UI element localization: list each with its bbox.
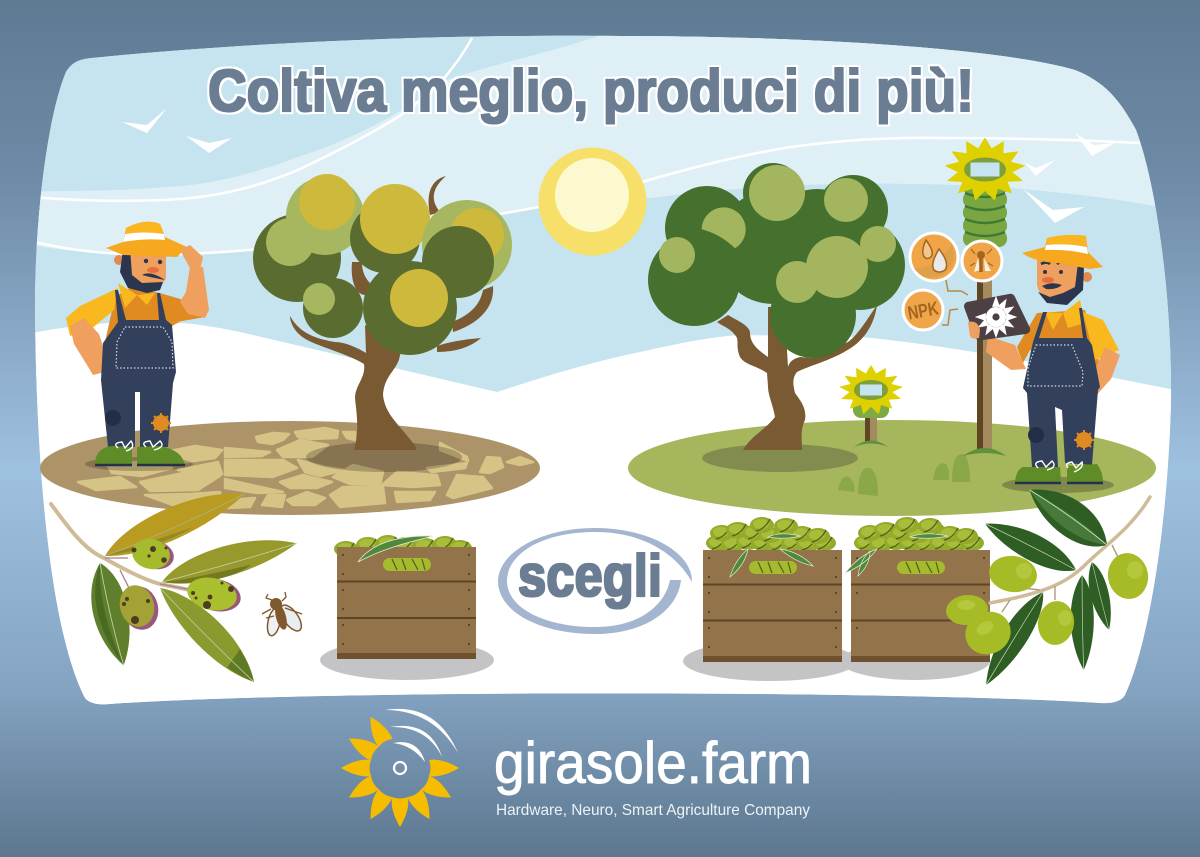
icon: water drops [910,233,958,281]
collar [118,283,155,308]
birds [122,108,1115,223]
olive pile two [854,517,984,552]
white hills [0,322,1200,720]
smart sensor pole [945,138,1025,456]
sunflower head [945,138,1025,202]
foliage [648,163,905,358]
crate handle [383,558,431,571]
small sensor flower [839,366,903,447]
farmer shadow on grass [1002,477,1114,493]
patches [105,410,121,426]
leaf gold [98,477,250,568]
scattered olives on top [334,535,472,557]
crate one [703,550,842,662]
olive pile one [706,517,836,552]
shirt [1017,310,1100,370]
dry cracked ground [40,421,540,515]
left tree shadow [306,442,462,472]
hat [106,222,187,257]
overall pocket stitching [116,327,173,368]
arm to tablet [986,336,1026,370]
dry olive tree [253,174,512,450]
trunk and branches [717,305,877,450]
overall pocket stitching [1028,345,1083,386]
sleeve yellow [66,288,118,336]
shoes [1015,467,1061,482]
choose badge [498,528,692,634]
sensor stack [963,178,1007,247]
logo tagline: Hardware, Neuro, Smart Agriculture Company [496,802,810,819]
glossy leaves [975,474,1118,691]
diseased olive branch [51,477,300,691]
tablet [964,294,1030,340]
main rounded panel [35,36,1172,704]
arm on hip [1082,347,1120,399]
trunk and branches [290,176,493,450]
left worried farmer [66,222,209,465]
crate leaves [730,534,813,577]
hand on tablet [968,322,980,339]
overalls [101,290,176,447]
leaf green [82,559,140,669]
logo wordmark: girasole.farm [494,731,812,796]
shirt [105,288,207,342]
sky [35,36,1171,392]
head [1082,272,1092,282]
farmer shadow on dry ground [85,457,193,471]
single poor crate [320,535,494,680]
crate handles [749,561,945,574]
collar [1045,300,1085,330]
overalls [1023,308,1100,467]
sun [538,148,646,256]
icon: NPK [903,290,943,330]
title: Coltiva meglio, produci di più! [208,58,974,124]
wispy white cloud lines [30,38,1140,254]
hand on hat brim [180,245,203,270]
head [114,255,124,265]
hat [1022,235,1103,269]
choose word: scegli [518,543,662,609]
leaf olive [157,527,300,594]
green olives [945,550,1152,662]
crate leaf [358,536,433,562]
icon: NPK: NPK [906,298,941,325]
right tree shadow [702,444,858,472]
crate body [337,547,476,659]
leaf lower [151,576,266,691]
fly pest [262,592,305,637]
patches [1028,427,1044,443]
shoes [95,446,132,465]
signal connector lines [942,280,968,325]
arm on hip [70,318,109,375]
foliage [253,174,512,355]
healthy olive branch [945,474,1152,691]
right happy farmer with tablet [964,235,1120,483]
green healthy ground [628,420,1156,516]
grass tufts [838,454,970,496]
healthy olive tree [648,163,905,450]
spotted olives [115,535,244,634]
crate two [851,550,990,662]
arm raised [180,267,209,318]
two full crates [683,517,990,681]
pale upper sky band [36,36,1156,252]
logo: girasole sunflower [341,709,459,827]
icon: fly sensor [962,241,1002,281]
